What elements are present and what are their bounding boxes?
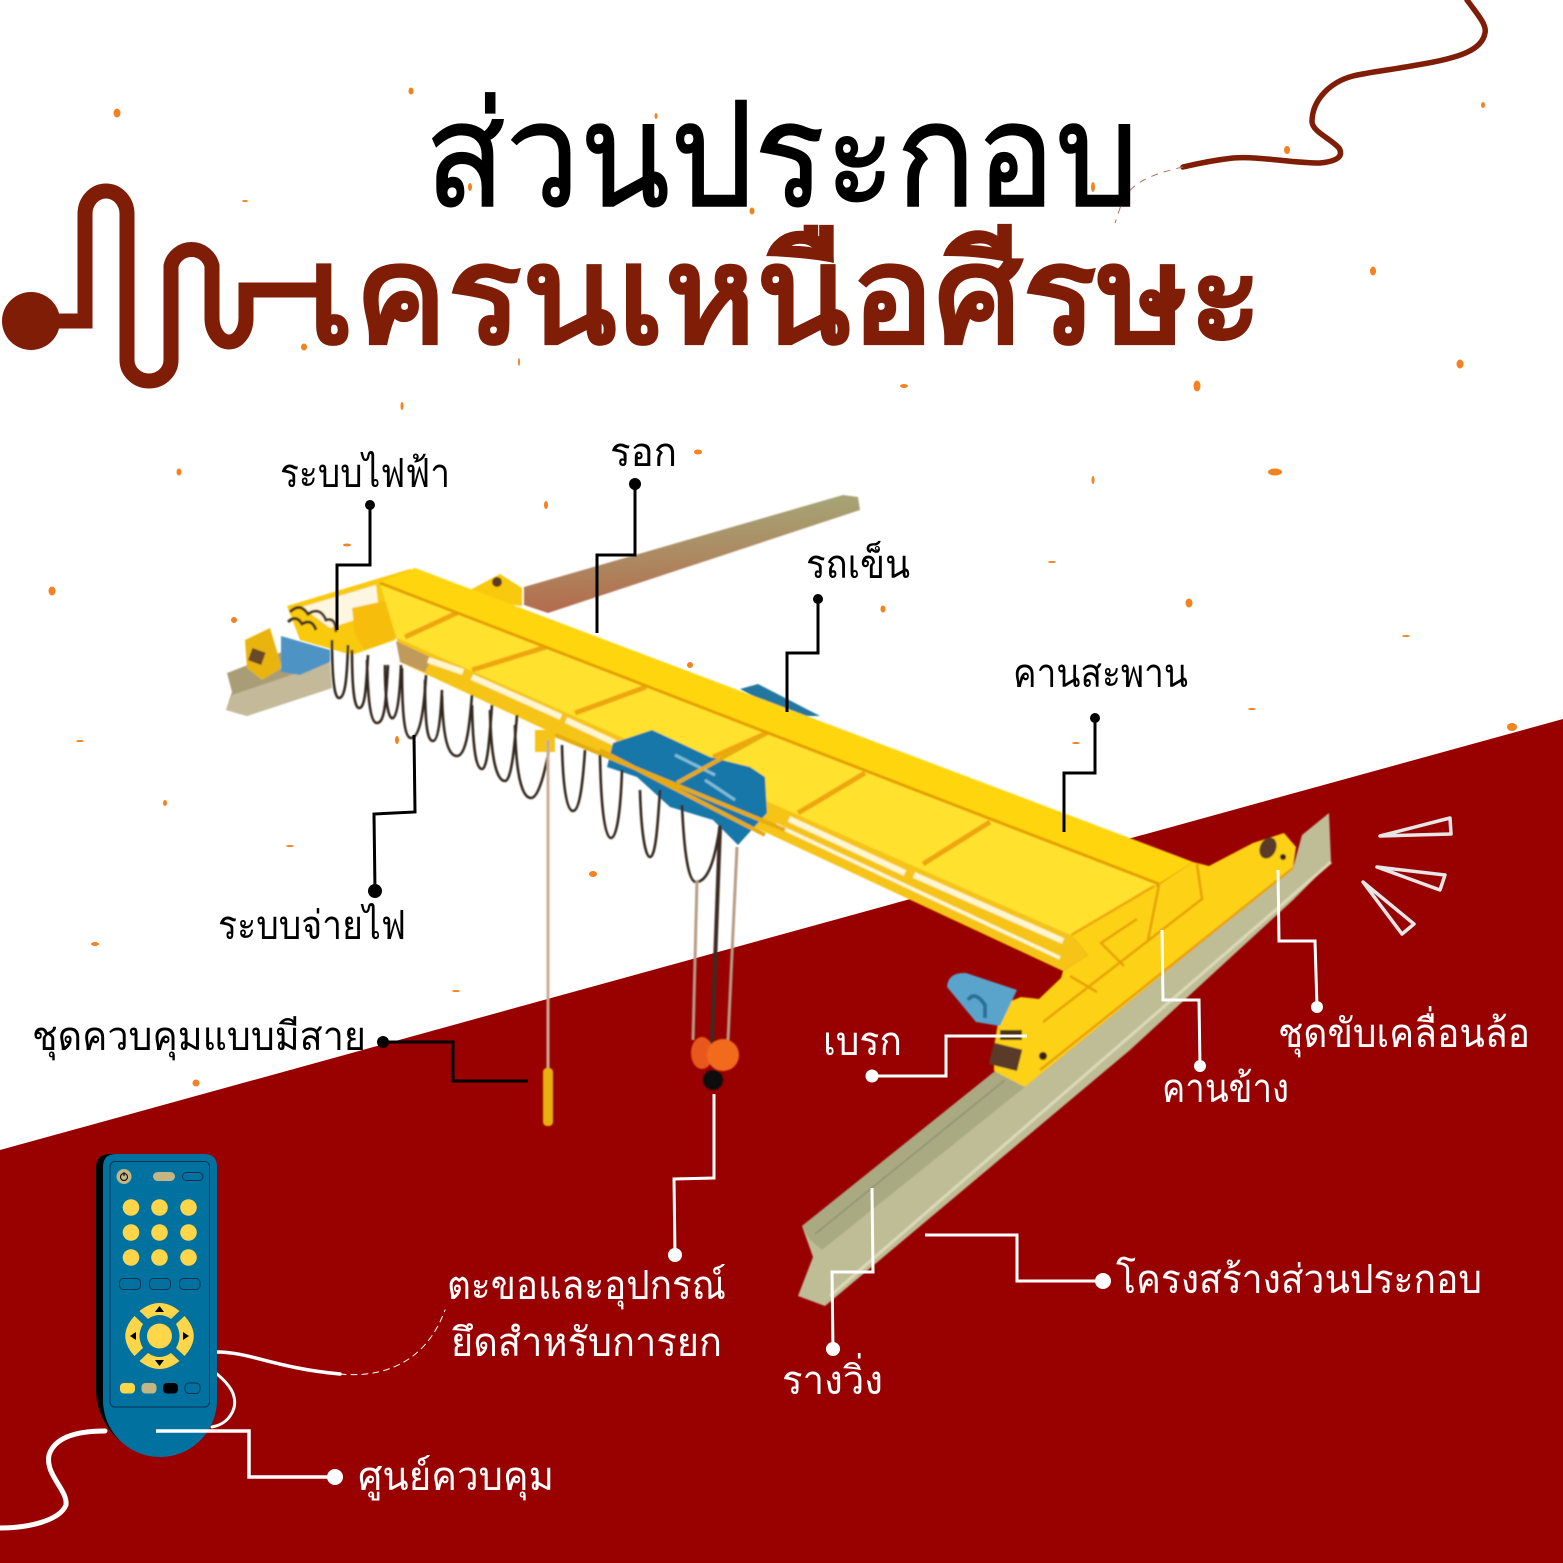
leader: wired control [377, 1036, 528, 1081]
leader: wheel drive [1278, 870, 1323, 1013]
leader: trolley [787, 594, 823, 712]
leader: hook [668, 1094, 714, 1262]
pendant control wire [546, 740, 550, 1070]
power button [116, 1169, 132, 1184]
bridge girder lower rail [397, 638, 1088, 971]
far end truck [245, 569, 522, 680]
title line 2: เครนเหนือศีรษะ [307, 219, 1263, 373]
label: wheel drive: ชุดขับเคลื่อนล้อ [1278, 1006, 1530, 1058]
label: end carriage: คานข้าง [1162, 1067, 1289, 1111]
remote face panel [110, 1162, 210, 1407]
white cables from remote [0, 1310, 445, 1528]
leader: runway rail [826, 1188, 873, 1356]
label: electrical system: ระบบไฟฟ้า [280, 451, 450, 496]
festoon power cables [332, 640, 720, 882]
direction pad [125, 1303, 194, 1369]
leader: electrical system [337, 500, 375, 630]
pendant attachment block [535, 730, 555, 752]
near runway rail [798, 813, 1331, 1306]
label: power supply: ระบบจ่ายไฟ [218, 903, 406, 948]
leader: structure [925, 1235, 1111, 1289]
far motor: blue [281, 636, 330, 675]
top pills [153, 1172, 203, 1181]
far runway rail [226, 495, 860, 716]
near end truck [989, 833, 1296, 1087]
motion accent triangles [1363, 818, 1451, 934]
pendant control [543, 1068, 553, 1126]
decorative brown wave line with dot, left of heading [2, 191, 320, 381]
background: dark red diagonal panel [0, 719, 1563, 1563]
label: structure: โครงสร้างส่วนประกอบ [1116, 1257, 1482, 1302]
wave dot [2, 292, 60, 350]
hoist ropes [693, 827, 737, 1045]
icon: remote control [96, 1154, 217, 1457]
label line 1: ตะขอและอุปกรณ์ [447, 1263, 726, 1310]
hook block [691, 1037, 739, 1090]
bridge girder panel separators [405, 612, 1155, 936]
function buttons [120, 1278, 200, 1290]
number buttons [123, 1199, 197, 1266]
trolley hoist: blue [555, 730, 785, 845]
near motor: blue [947, 973, 1017, 1026]
crane illustration [226, 495, 1331, 1306]
decorative brown squiggle: fading tail [1115, 167, 1183, 223]
label: wired control: ชุดควบคุมแบบมีสาย [32, 1015, 366, 1061]
title line 1: ส่วนประกอบ [425, 74, 1139, 237]
label: bridge girder: คานสะพาน [1013, 652, 1188, 696]
leader: control centre [156, 1431, 343, 1485]
small trolley end behind girder [740, 684, 820, 716]
decorative orange specks [48, 88, 1517, 1086]
far wheels [245, 628, 282, 680]
leader: hoist [597, 478, 641, 633]
label: hook and lifting attachments [447, 1263, 726, 1365]
leader: brake [866, 1036, 1027, 1082]
bridge girder walkway panels [380, 583, 1159, 936]
bridge girder top band [380, 568, 1193, 884]
remote body [103, 1154, 217, 1457]
label: brake: เบรก [823, 1020, 902, 1064]
leader: end carriage [1162, 930, 1206, 1072]
label: runway rail: รางวิ่ง [782, 1353, 883, 1403]
label line 2: ยึดสำหรับการยก [451, 1321, 722, 1365]
leader: bridge girder [1064, 713, 1100, 832]
remote shadow [96, 1154, 160, 1457]
bottom buttons [120, 1383, 200, 1394]
wave line [31, 191, 320, 381]
label: control centre: ศูนย์ควบคุม [358, 1454, 554, 1501]
label: hoist: รอก [610, 431, 677, 475]
decorative brown squiggle: top right [1183, 0, 1485, 167]
leader: power supply [368, 735, 415, 898]
label: trolley: รถเข็น [806, 540, 910, 587]
